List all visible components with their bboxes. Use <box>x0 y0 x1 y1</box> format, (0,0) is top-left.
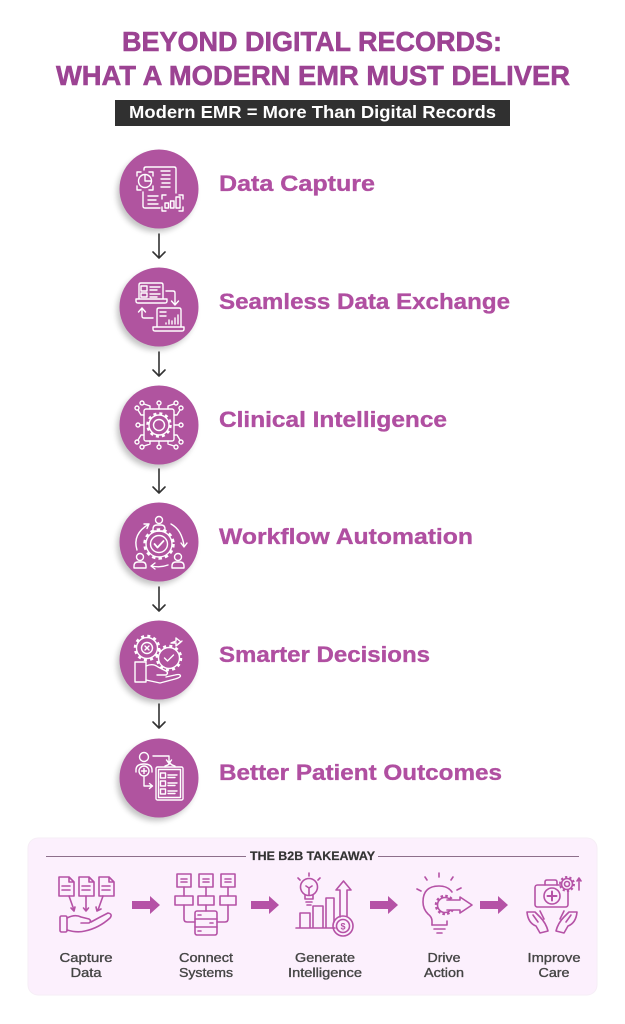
step 5: smarter decisions <box>117 620 198 703</box>
icon: data capture <box>137 167 183 211</box>
step labels: Workflow Automation <box>219 524 473 549</box>
icon: chip with gear <box>135 401 183 449</box>
icon: generate intelligence: $ <box>340 922 346 932</box>
arrow <box>251 896 279 914</box>
icon: improve care <box>527 877 581 933</box>
arrow <box>480 896 508 914</box>
step labels <box>219 171 510 785</box>
title: BEYOND DIGITAL RECORDS: <box>122 26 502 57</box>
arrow 2 <box>153 352 165 376</box>
step captions: Action <box>424 965 464 980</box>
icon: drive action <box>417 873 472 933</box>
step 6: better patient outcomes <box>117 738 198 821</box>
arrow 3 <box>153 469 165 493</box>
panel heading: THE B2B TAKEAWAY <box>250 851 375 863</box>
icon: connect systems <box>175 874 236 935</box>
step captions: Capture <box>60 950 112 965</box>
title <box>56 26 570 91</box>
step captions: Generate <box>295 950 355 965</box>
icon: gear with check and people cycle <box>134 516 187 569</box>
step captions: Care <box>538 965 570 980</box>
step 1: data capture <box>117 150 198 232</box>
step 4: workflow automation <box>117 502 198 585</box>
arrow 4 <box>153 587 165 611</box>
step captions <box>60 950 580 980</box>
step captions: Intelligence <box>288 965 362 980</box>
step labels: Data Capture <box>219 171 375 196</box>
step captions: Systems <box>179 965 234 980</box>
subtitle banner <box>115 100 510 126</box>
icon: gears over hand <box>135 636 182 683</box>
arrow 1 <box>153 234 165 258</box>
subtitle banner: Modern EMR = More Than Digital Records <box>129 102 496 122</box>
icon: capture data <box>59 877 114 932</box>
arrow <box>132 896 160 914</box>
step captions: Data <box>70 965 102 980</box>
arrow <box>370 896 398 914</box>
step captions: Drive <box>428 950 460 965</box>
icon: laptops exchanging data <box>136 283 184 331</box>
step labels: Smarter Decisions <box>219 642 430 667</box>
arrow 5 <box>153 704 165 728</box>
panel: B2B takeaway <box>28 838 597 995</box>
step captions: Improve <box>528 950 580 965</box>
step 3: clinical intelligence <box>117 386 198 468</box>
icon: generate intelligence <box>296 873 353 936</box>
step labels: Clinical Intelligence <box>219 407 447 432</box>
title: WHAT A MODERN EMR MUST DELIVER <box>56 60 570 91</box>
step labels: Seamless Data Exchange <box>219 289 510 314</box>
step 2: seamless data exchange <box>117 268 198 350</box>
step captions: Connect <box>179 950 233 965</box>
icon: patient and checklist <box>136 752 183 800</box>
step labels: Better Patient Outcomes <box>219 760 502 785</box>
